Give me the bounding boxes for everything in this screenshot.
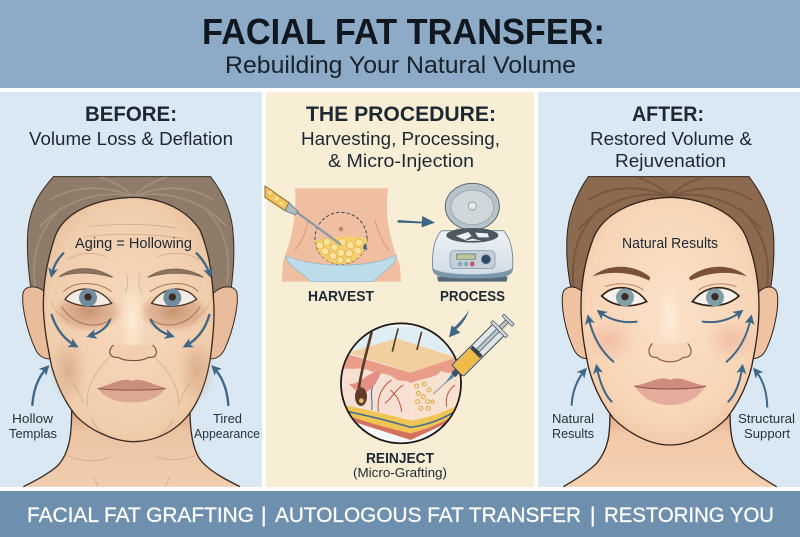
procedure subheading: & Micro-Injection (328, 150, 474, 171)
after heading: AFTER: (632, 103, 704, 126)
label: structural support: Structural (738, 411, 795, 426)
label: reinject: REINJECT (366, 450, 434, 467)
label: micro-grafting: (Micro-Grafting) (353, 465, 447, 480)
lift arrows (572, 312, 767, 407)
lips (634, 378, 706, 405)
footer text: | (261, 504, 266, 527)
footer text: | (590, 504, 595, 527)
label: tired appearance: Appearance (194, 426, 260, 441)
harvest abdomen (282, 188, 401, 282)
right eye (692, 288, 739, 306)
nose (110, 345, 156, 361)
cannula syringe (265, 186, 340, 244)
label: structural support: Support (744, 426, 790, 441)
footer text: AUTOLOGOUS FAT TRANSFER (275, 504, 581, 527)
hair follicle (358, 332, 372, 392)
panel: after (538, 92, 800, 487)
reinjection syringe (437, 312, 517, 392)
lips (98, 380, 166, 402)
label: hollow temples: Hollow (12, 411, 54, 426)
after subheading: Rejuvenation (615, 150, 726, 171)
illustration: restored face (562, 177, 778, 487)
label: natural results top: Natural Results (622, 236, 718, 252)
panel: procedure (265, 92, 534, 487)
panel: before (0, 92, 262, 487)
illustration: procedure steps (265, 183, 517, 443)
before subheading: Volume Loss & Deflation (29, 128, 233, 149)
left eye (65, 289, 112, 307)
label: hollow temples: Templas (9, 426, 57, 441)
procedure heading: THE PROCEDURE: (306, 103, 496, 126)
illustration: aged face (23, 177, 240, 487)
before heading: BEFORE: (85, 103, 177, 126)
procedure subheading: Harvesting, Processing, (301, 128, 500, 149)
label: tired appearance: Tired (213, 411, 242, 426)
footer text: FACIAL FAT GRAFTING (27, 504, 254, 527)
label: process: PROCESS (440, 288, 505, 305)
footer text: RESTORING YOU (604, 504, 774, 527)
skin cross-section (340, 323, 462, 443)
left eye (602, 288, 647, 306)
label: harvest: HARVEST (308, 288, 374, 305)
nose (649, 343, 691, 362)
label: natural results: Results (552, 426, 594, 441)
header band (0, 0, 800, 88)
right eye (152, 289, 197, 307)
after subheading: Restored Volume & (590, 128, 753, 149)
subtitle: Rebuilding Your Natural Volume (225, 52, 576, 79)
label: aging: Aging = Hollowing (75, 235, 192, 252)
footer band (0, 491, 800, 537)
title: FACIAL FAT TRANSFER: (202, 11, 605, 52)
dark hollowing arrows (32, 253, 228, 405)
centrifuge (432, 183, 513, 282)
label: natural results: Natural (552, 411, 594, 426)
arrow to process (398, 216, 435, 227)
arrow to reinject (449, 310, 469, 337)
